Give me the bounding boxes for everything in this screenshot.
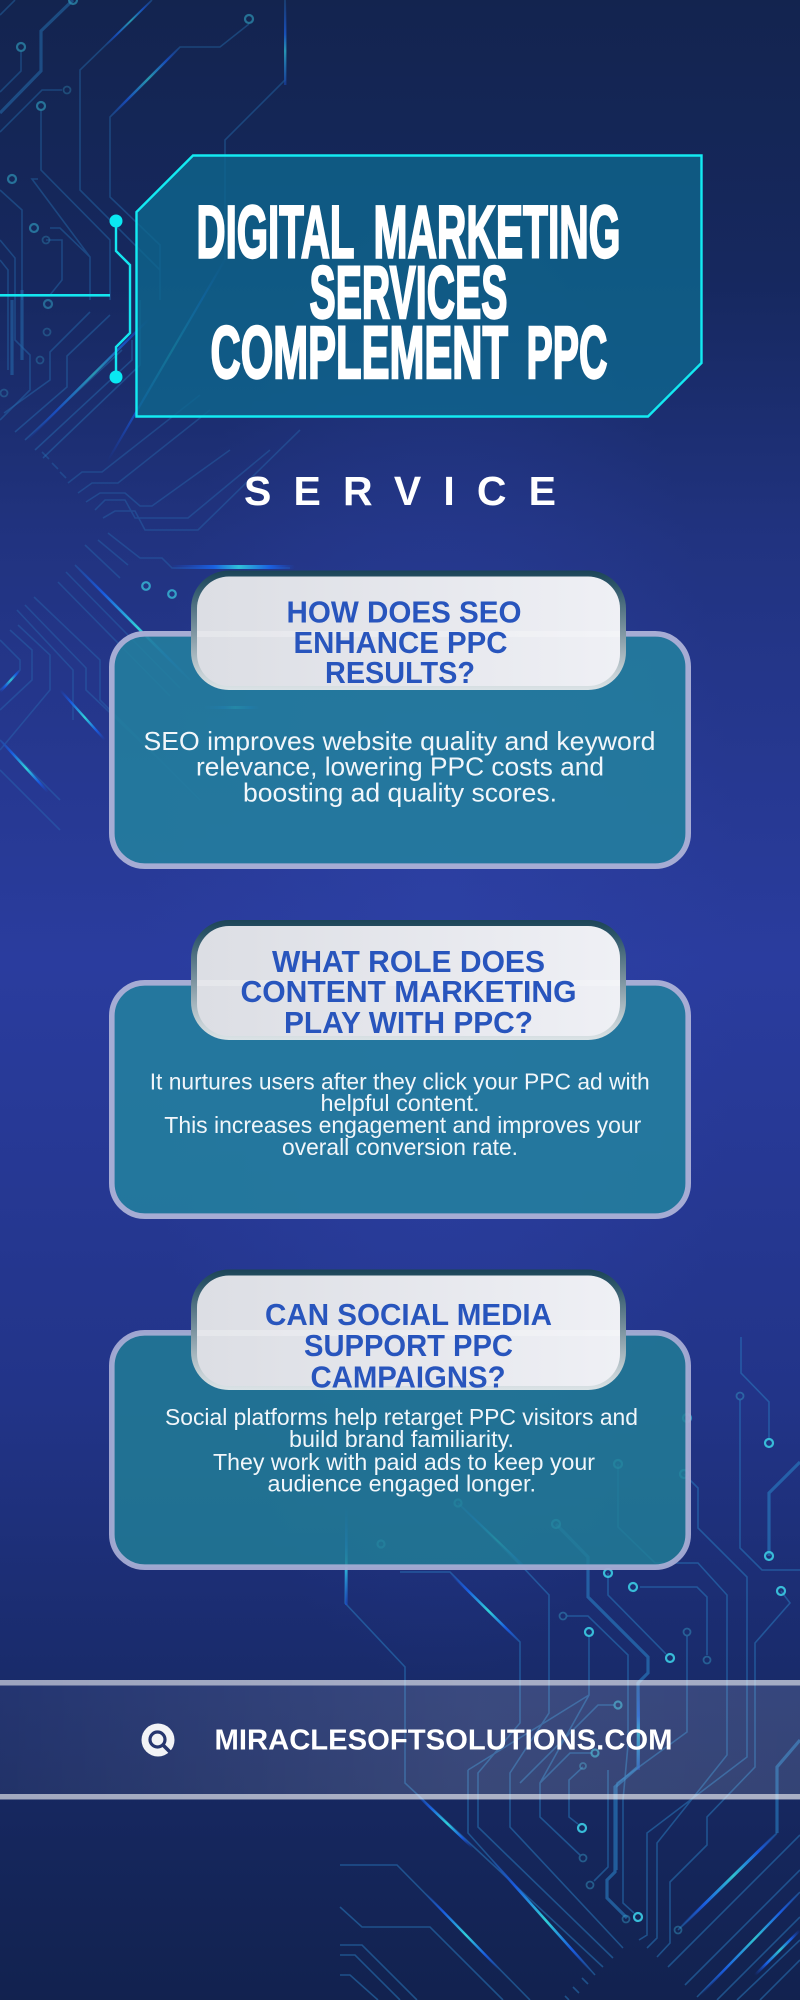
card heading: SEO: HOW DOES SEO [286, 594, 522, 630]
card body: social media: Social platforms help retarget PPC visitors and [165, 1404, 638, 1430]
title text [196, 190, 620, 394]
circuit pattern: top left [0, 0, 286, 462]
card body: social media: build brand familiarity. [289, 1426, 514, 1452]
card heading: social media: SUPPORT PPC [304, 1328, 513, 1363]
card body: content marketing: It nurtures users after they click your PPC ad with [150, 1068, 650, 1094]
card heading: social media: CAMPAIGNS? [310, 1359, 506, 1394]
card body: content marketing [150, 1068, 650, 1160]
decorative cyan line left of title [0, 294, 110, 297]
card heading: content marketing [191, 920, 626, 1040]
card body: SEO: boosting ad quality scores. [243, 778, 557, 808]
icon: search [142, 1724, 174, 1756]
card body: SEO [144, 726, 656, 808]
card body: content marketing: helpful content. [320, 1090, 480, 1116]
title text: SERVICES [310, 251, 508, 334]
card heading: social media: CAN SOCIAL MEDIA [265, 1297, 552, 1332]
card heading: content marketing: PLAY WITH PPC? [284, 1005, 533, 1040]
card heading: content marketing: CONTENT MARKETING [240, 974, 576, 1009]
circuit pattern: bottom right [340, 1337, 800, 2000]
card body: social media: audience engaged longer. [268, 1471, 536, 1497]
card heading: SEO [191, 570, 626, 690]
title text: PPC [526, 311, 608, 394]
card heading: social media [191, 1270, 626, 1394]
section label: service: SERVICE [244, 468, 556, 514]
card body: content marketing: This increases engagement and improves your [164, 1112, 642, 1138]
title text: COMPLEMENT [210, 311, 508, 394]
card heading: content marketing: WHAT ROLE DOES [272, 944, 545, 979]
title connector line with dots [110, 214, 130, 384]
card body: social media: They work with paid ads to keep your [213, 1449, 595, 1475]
circuit pattern: lower left traces [0, 395, 300, 830]
card heading: SEO: ENHANCE PPC [294, 625, 508, 660]
website url: MIRACLESOFTSOLUTIONS.COM [214, 1724, 672, 1756]
title text: DIGITAL [196, 190, 354, 274]
card heading: SEO: RESULTS? [325, 655, 475, 690]
card body: SEO: SEO improves website quality and keyword [144, 726, 656, 756]
panel: content marketing card [112, 920, 688, 1216]
panel: social media card [112, 1270, 688, 1567]
card body: SEO: relevance, lowering PPC costs and [196, 752, 604, 782]
footer band [0, 1680, 800, 1800]
card body: content marketing: overall conversion rate. [282, 1134, 518, 1160]
title panel [136, 156, 702, 416]
panel: SEO card [112, 570, 688, 866]
card body: social media [165, 1404, 638, 1497]
